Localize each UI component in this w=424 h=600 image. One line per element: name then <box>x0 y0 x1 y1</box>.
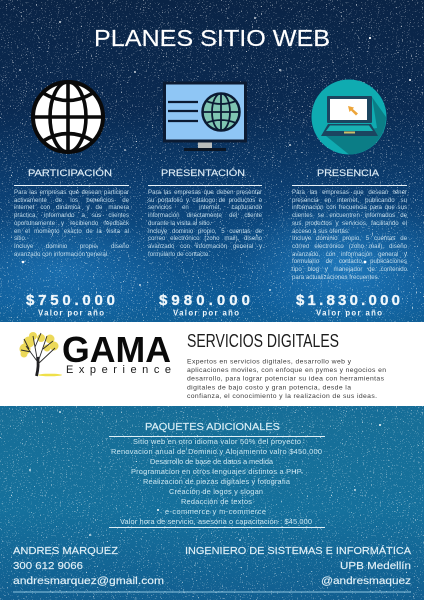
logo: GAMA Experience <box>20 329 171 376</box>
list: paquetes adicionales: Realizacion de piezas digitales y fotografia <box>143 477 291 486</box>
text block: presencia: sus productos y servicios, facilitando el <box>292 220 407 227</box>
icon: laptop badge <box>312 80 386 154</box>
text block: participación: práctica, informando a sus clientes <box>14 212 129 219</box>
list: paquetes adicionales: Creación de logos y slogan <box>169 487 263 496</box>
text block: servicios digitales: aplicaciones moviles, con enfoque en pymes y negocios en <box>187 367 386 374</box>
text block: presentación: correo electrónico (zoho mail), diseño <box>148 235 262 242</box>
text block: presentación: servicios en internet, capturando <box>148 204 262 211</box>
footer: profession <box>185 544 411 587</box>
text block: servicios digitales: confianza, el conocimiento y la realizacion de sus ideas. <box>187 393 377 400</box>
text block: presencia: presencia en internet, publicando su <box>292 197 407 204</box>
list: paquetes adicionales: Redacción de textos <box>181 497 252 506</box>
price: presentación: $980.000 <box>159 292 250 309</box>
footer: contact: andresmarquez@gmail.com <box>13 575 164 587</box>
heading: servicios digitales: SERVICIOS DIGITALES <box>187 330 339 351</box>
icon: monitor with globe <box>164 83 246 151</box>
text block: participación: en el momento exacto de la visita al <box>14 228 129 235</box>
text block: participación: avanzado con información general. <box>14 251 109 258</box>
price: presencia <box>296 292 400 318</box>
logo: GAMA Experience: GAMA <box>62 329 171 370</box>
footer: contact: 300 612 9066 <box>13 560 83 572</box>
price: presentación: Valor por año <box>173 308 239 318</box>
text block: presentación: avanzado con información general y <box>148 243 262 250</box>
logo: GAMA Experience: Experience <box>66 364 171 376</box>
text block: participación: oportunamente y recibiendo feedback <box>14 220 129 227</box>
footer: contact: ANDRES MARQUEZ <box>13 545 119 557</box>
text block: presencia <box>292 189 407 285</box>
price: presentación <box>159 292 250 318</box>
heading: paquetes adicionales: PAQUETES ADICIONALES <box>145 422 280 433</box>
text block: servicios digitales <box>187 358 386 400</box>
icon: globe <box>33 82 103 152</box>
list: paquetes adicionales: Sitio web en otro idioma valor 50% del proyecto <box>133 437 301 446</box>
list: paquetes adicionales: Renovacion anual de Dominio y Alojamiento valro $450.000 <box>111 447 322 456</box>
text block: presencia: información con frecuencia para que sus <box>292 204 407 211</box>
text block: servicios digitales: digitales de bajo costo y gran potencia, desde la <box>187 384 351 392</box>
price: participación: $750.000 <box>26 292 115 309</box>
icon: tree <box>20 332 62 376</box>
text block: presencia: avanzado, con información general y <box>292 251 407 258</box>
text block: presencia: formulario de contacto, publicaciones <box>292 258 407 265</box>
column rules <box>14 184 407 186</box>
white band: company <box>0 322 424 406</box>
price: presencia: Valor por año <box>316 308 382 318</box>
text block: presentación: su portafolio y catálogo de productos o <box>148 197 262 204</box>
price: presencia: $1.830.000 <box>296 292 400 309</box>
text block: presencia: tipo blog y manejador de contenido <box>292 266 407 273</box>
text block: presencia: clientes se encuentren informados de <box>292 212 407 219</box>
text block: presencia: Incluye dominio propio, 5 cuentas de <box>292 235 407 242</box>
list: paquetes adicionales: Programacion en otros lenguajes distintos a PHP. <box>131 467 303 476</box>
text block: servicios digitales: Expertos en servicios digitales, desarrollo web y <box>187 358 352 366</box>
text block: participación <box>14 189 129 261</box>
price: participación: Valor por año <box>38 308 104 318</box>
text block: presentación: información directamente del cliente <box>148 212 262 219</box>
footer: profession: @andresmaquez <box>321 575 411 587</box>
text block: presentación: formulario de contacto. <box>148 251 210 258</box>
text block: participación: sitio. <box>14 235 27 242</box>
text block: presencia: correo electrónico (zoho mail), diseño <box>292 243 407 250</box>
text block: presentación: durante la visita al sitio. <box>148 220 211 227</box>
heading: presentación: PRESENTACIÓN <box>161 168 245 179</box>
title: PLANES SITIO WEB <box>94 25 330 51</box>
text block: presentación <box>148 189 262 261</box>
text block: participación: Para las empresas que desean participar <box>14 189 129 196</box>
list: paquetes adicionales: Valor hora de servicio, asesoria o capacitación : $45.000 <box>120 517 312 526</box>
text block: presentación: Incluye dominio propio, 5 cuentas de <box>148 228 262 235</box>
text block: presencia: acceso a sus ofertas. <box>292 228 350 235</box>
footer rule <box>13 591 411 593</box>
price: participación <box>26 292 115 318</box>
list: paquetes adicionales <box>111 437 322 526</box>
footer: profession: UPB Medellín <box>340 560 411 572</box>
text block: participación: internet con dinámica y de manera <box>14 204 129 211</box>
footer: contact <box>13 545 164 587</box>
text block: presencia: Para las empresas que desean tener <box>292 189 407 196</box>
text block: participación: activamente de los beneficios de <box>14 197 129 204</box>
list: paquetes adicionales: Desarrollo de base de datos a medida <box>150 457 274 466</box>
footer: profession: INGENIERO DE SISTEMAS E INFORMÁTICA <box>185 544 411 557</box>
list: paquetes adicionales: e-commerce y m-commerce <box>165 507 266 516</box>
text block: presentación: Para las empresas que deben presentar <box>148 189 262 196</box>
list rules <box>109 436 325 528</box>
heading: presencia: PRESENCIA <box>317 168 380 179</box>
text block: servicios digitales: desarrollo, para lograr potenciar su idea con herramientas <box>187 376 385 382</box>
heading: participación: PARTICIPACIÓN <box>28 168 112 179</box>
text block: participación: Incluye dominio propio, diseño <box>14 243 129 250</box>
text block: presencia: para actualizaciones frecuentes. <box>292 274 379 281</box>
